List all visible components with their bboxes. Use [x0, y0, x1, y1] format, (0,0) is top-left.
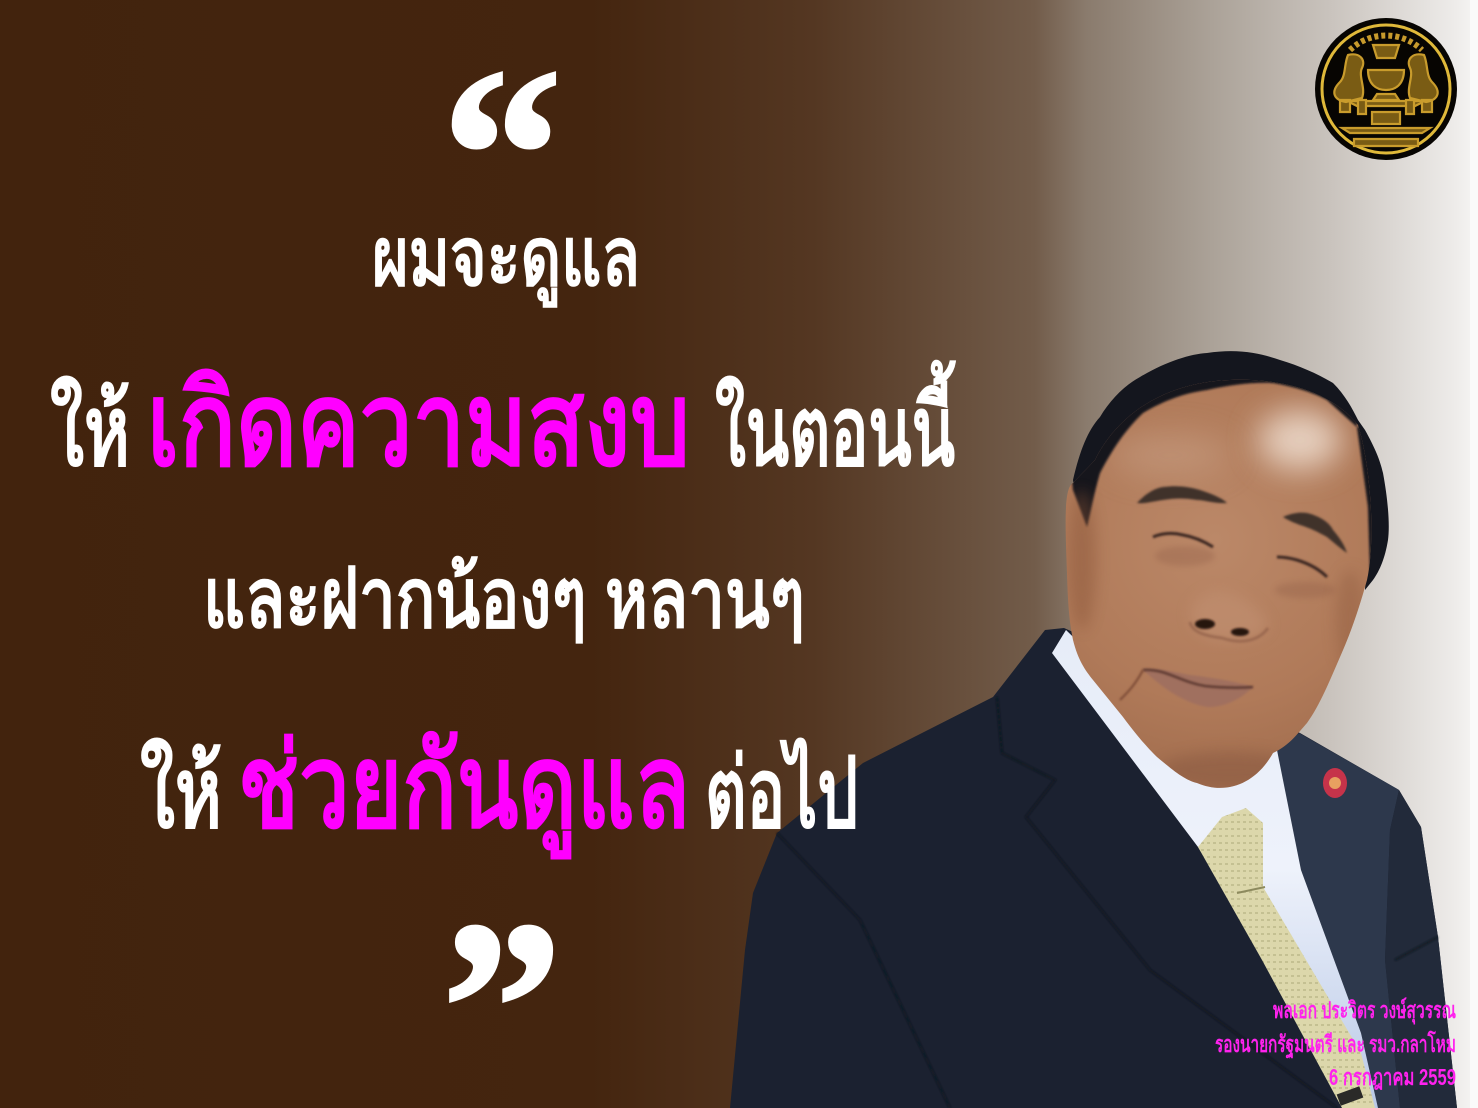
forehead highlight: [1258, 410, 1342, 470]
quote line 1: ผมจะดูแล: [372, 212, 640, 308]
cheek shade: [1068, 490, 1096, 630]
jaw wrinkle: [1120, 670, 1143, 700]
seal emblem: [1334, 45, 1438, 146]
attribution caption: [1215, 997, 1456, 1090]
quote line 4: ช่วยกันดูแล: [238, 721, 690, 860]
quote line 4: ต่อไป: [705, 737, 858, 848]
edge strip: [1470, 0, 1478, 1108]
hairline mass: [1071, 380, 1358, 527]
mouth: [1143, 669, 1253, 707]
tie: [1198, 808, 1375, 1108]
opening quote mark: “: [442, 17, 562, 292]
quote line 4: ให้: [140, 738, 222, 848]
left eyebrow: [1137, 486, 1227, 503]
quote line 2: ในตอนนี้: [715, 359, 957, 486]
lion left: [1334, 54, 1366, 114]
face: [1066, 380, 1372, 788]
lapel pin: [1323, 768, 1347, 798]
lapel details: [777, 697, 1438, 1108]
jacket: [730, 628, 1457, 1108]
quote line 2: เกิดความสงบ: [147, 359, 690, 491]
lion right: [1406, 54, 1438, 114]
portrait photo: [730, 351, 1457, 1108]
eyes: [1153, 533, 1213, 547]
quote line 2: ให้: [50, 376, 130, 486]
government seal: [1315, 18, 1457, 160]
right lapel: [1277, 733, 1400, 1108]
shirt: [1052, 630, 1378, 1108]
seal flame arc: [1350, 36, 1422, 50]
urn: [1368, 45, 1404, 100]
nose: [1197, 600, 1260, 636]
hair: [1073, 351, 1389, 590]
quote line 3: และฝากน้องๆ หลานๆ: [203, 551, 805, 645]
right eyebrow: [1283, 513, 1347, 553]
table: [1342, 101, 1430, 146]
